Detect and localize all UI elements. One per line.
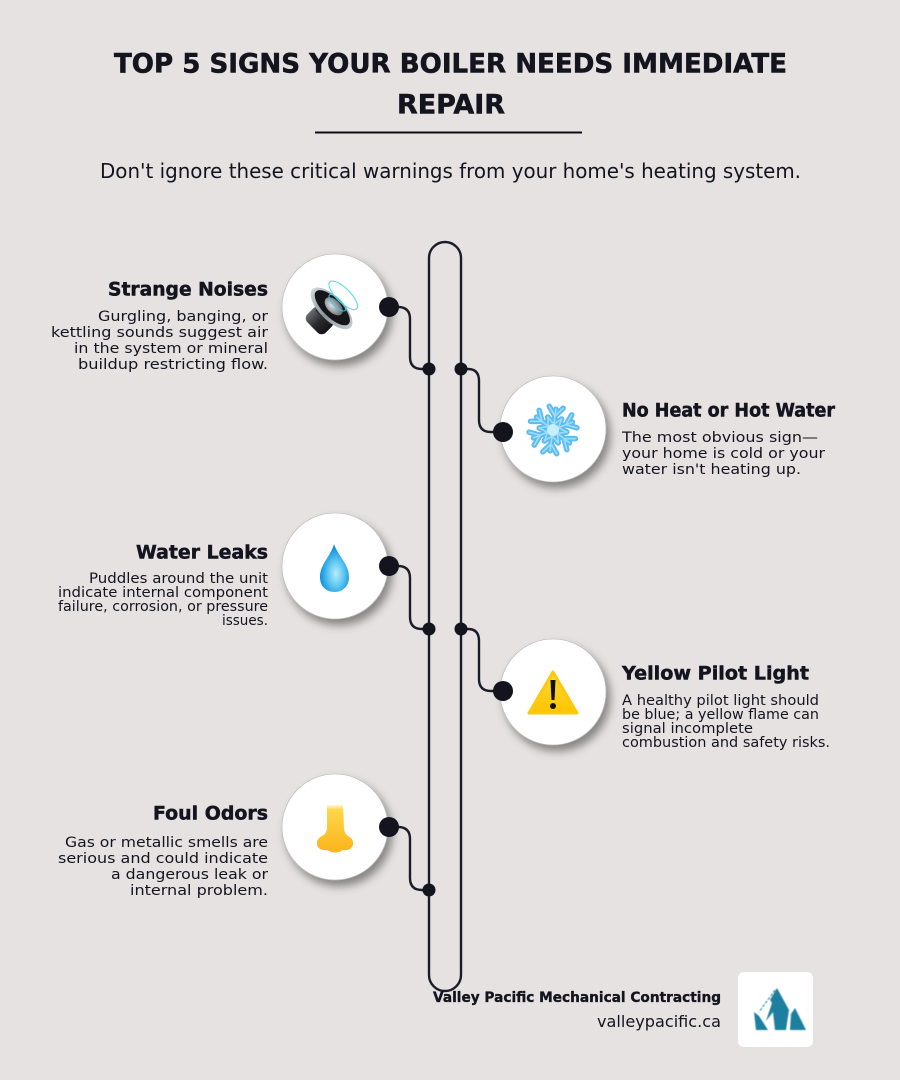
panel: foul odors — [58, 774, 399, 899]
panel: no heat or hot water — [493, 376, 836, 482]
panel: water leaks — [58, 513, 399, 629]
text: water leaks description: indicate internal component — [58, 585, 268, 601]
text: water leaks description: issues. — [222, 613, 268, 629]
title: REPAIR — [397, 90, 505, 120]
panel: yellow pilot light — [493, 639, 830, 751]
icon circle: speaker — [282, 254, 388, 360]
icon circle: warning triangle — [500, 639, 606, 745]
text: yellow pilot light description: A healthy pilot light should — [622, 693, 819, 709]
logo — [738, 972, 813, 1047]
icon circle: water drop — [282, 513, 388, 619]
text: strange noises description: in the system or mineral — [74, 341, 268, 357]
text: foul odors description: serious and could indicate — [58, 851, 268, 867]
timeline junction dots — [422, 362, 468, 896]
heading: water leaks: Water Leaks — [136, 542, 268, 564]
central timeline track — [389, 242, 503, 991]
text: foul odors description: a dangerous leak or — [111, 867, 268, 883]
connector dot — [379, 297, 399, 317]
text: water leaks description: Puddles around the unit — [89, 571, 268, 587]
title — [114, 48, 787, 120]
text: foul odors description — [58, 835, 268, 899]
title: TOP 5 SIGNS YOUR BOILER NEEDS IMMEDIATE — [114, 48, 787, 80]
subtitle: Don't ignore these critical warnings from your home's heating system. — [100, 159, 801, 183]
text: yellow pilot light description — [622, 693, 830, 751]
panel: strange noises — [51, 254, 399, 373]
text: strange noises description: kettling sounds suggest air — [51, 325, 268, 341]
text: strange noises description: buildup restricting flow. — [78, 357, 268, 373]
icon circle: snowflake — [500, 376, 606, 482]
text: yellow pilot light description: be blue; a yellow flame can — [622, 707, 819, 723]
heading: foul odors: Foul Odors — [153, 802, 268, 824]
text: foul odors description: Gas or metallic smells are — [65, 835, 268, 851]
icon circle: nose — [282, 774, 388, 880]
connector dot — [493, 422, 513, 442]
text: no heat description: The most obvious sign— — [621, 430, 818, 446]
footer brand text: valleypacific.ca — [597, 1012, 721, 1031]
connector dot — [493, 681, 513, 701]
title underline — [315, 132, 582, 134]
heading: no heat: No Heat or Hot Water — [622, 400, 836, 422]
connector dot — [379, 817, 399, 837]
text: foul odors description: internal problem. — [130, 883, 268, 899]
text: water leaks description — [58, 571, 268, 629]
text: strange noises description — [51, 309, 268, 373]
text: no heat description: your home is cold or your — [622, 446, 825, 462]
heading: strange noises: Strange Noises — [108, 278, 268, 300]
text: water leaks description: failure, corrosion, or pressure — [58, 599, 268, 615]
text: yellow pilot light description: signal incomplete — [622, 721, 753, 737]
text: no heat description — [621, 430, 825, 478]
text: strange noises description: Gurgling, banging, or — [98, 309, 268, 325]
connector dot — [379, 556, 399, 576]
footer brand text — [433, 990, 721, 1031]
footer brand text: Valley Pacific Mechanical Contracting — [433, 990, 721, 1006]
text: no heat description: water isn't heating up. — [622, 462, 801, 478]
heading: yellow pilot light: Yellow Pilot Light — [621, 662, 809, 684]
text: yellow pilot light description: combustion and safety risks. — [622, 735, 830, 751]
